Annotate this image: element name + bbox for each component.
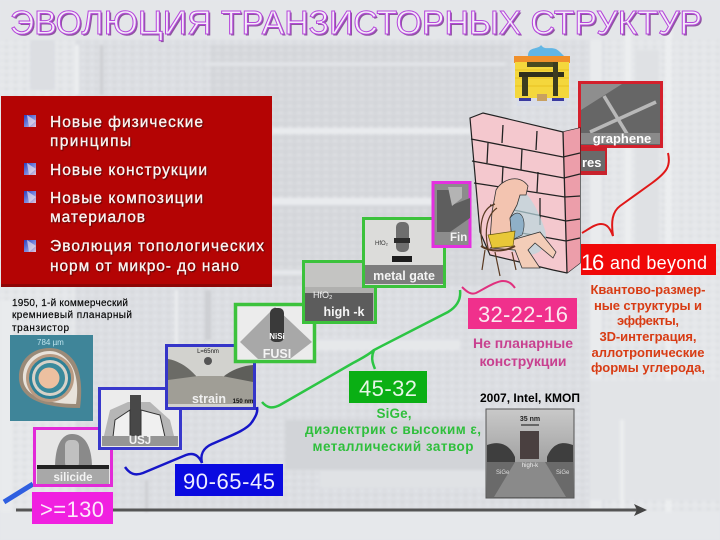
text: quantum structures: [590, 282, 706, 375]
text: non-planar constructions: Не планарные: [473, 335, 573, 351]
image: 2007 Intel transistor: high-k: [522, 463, 539, 469]
timeline arrow: [16, 504, 647, 516]
image: FUSI: FUSI: [263, 347, 291, 361]
label: 16 and beyond: and beyond: [610, 253, 707, 273]
blue brace: [125, 407, 257, 474]
text: non-planar constructions: [473, 335, 573, 369]
image: FinFET: [433, 182, 470, 246]
pink brace: [462, 281, 515, 294]
caption: 1950 transistor: кремниевый планарный: [12, 310, 132, 321]
text: quantum structures: формы углерода,: [591, 360, 705, 375]
image: FUSI: [236, 304, 314, 362]
image: FinFET: Fin: [450, 232, 467, 244]
text: new physical principles: принципы: [50, 133, 131, 150]
image: silicide: silicide: [54, 472, 92, 484]
text: topological norms evolution: Эволюция топологических: [50, 238, 264, 255]
label: >=130: [32, 492, 113, 524]
label: 16 and beyond: 6: [592, 250, 604, 275]
text: new material compositions: [50, 190, 203, 226]
label: 32-22-16: [468, 298, 577, 329]
image: strain: L=65nm: [197, 349, 219, 355]
label: 45-32: [349, 371, 427, 403]
text: quantum structures: аллотропические: [592, 345, 704, 360]
text: quantum structures: ные структуры и: [594, 298, 702, 313]
text: SiGe, high-k, metal gate: SiGe,: [376, 406, 412, 421]
image: planar transistor wafer: 784 µm: [37, 338, 64, 347]
figure: chair: [481, 204, 516, 276]
bullet 3: [24, 191, 36, 203]
image: strain: [166, 346, 254, 408]
image: silicide: [34, 428, 112, 486]
title: ЭВОЛЮЦИЯ ТРАНЗИСТОРНЫХ СТРУКТУР: [12, 6, 704, 42]
blue lead-in stroke: [4, 484, 33, 502]
text: SiGe, high-k, metal gate: [305, 406, 481, 454]
title: ЭВОЛЮЦИЯ ТРАНЗИСТОРНЫХ СТРУКТУР: [10, 4, 702, 41]
text: new physical principles: Новые физические: [50, 114, 203, 131]
label: 90-65-45: 90-65-45: [183, 469, 275, 494]
image: graphene: graphene: [593, 131, 651, 146]
caption: 1950 transistor: 1950, 1-й коммерческий: [12, 298, 128, 309]
image: nanotubes label: [580, 147, 607, 175]
image: high-k: high -k: [324, 305, 365, 319]
figure: cushion: [488, 231, 515, 248]
image: 2007 Intel transistor: SiGe: [556, 470, 570, 476]
label: 16 and beyond: 1: [581, 250, 593, 275]
text: new material compositions: Новые композиции: [50, 190, 203, 207]
image: graphene: [580, 82, 662, 146]
icon: 3D integration chip: [514, 45, 570, 106]
image: USJ: [100, 388, 180, 448]
figure: seated man: [490, 179, 556, 268]
red brace: [582, 153, 669, 236]
bullet 4: [24, 240, 36, 252]
label: >=130: >=130: [40, 497, 104, 522]
caption: 2007 Intel CMOS: 2007, Intel, КМОП: [480, 391, 580, 405]
image: planar transistor wafer: [10, 335, 93, 421]
image: 2007 Intel transistor: [486, 409, 574, 498]
label: 32-22-16: 32-22-16: [478, 302, 568, 327]
label: 45-32: 45-32: [359, 376, 417, 401]
image: metal gate: HfO₂: [375, 241, 389, 247]
text: topological norms evolution: норм от микро- до нано: [50, 258, 239, 275]
image: 2007 Intel transistor: 35 nm: [520, 416, 540, 423]
green brace: [262, 290, 460, 407]
image: 2007 Intel transistor: SiGe: [496, 470, 510, 476]
image: high-k: [304, 262, 376, 322]
bullet 2: [24, 163, 36, 175]
image: strain: strain: [192, 392, 226, 406]
text: quantum structures: 3D-интеграция,: [600, 329, 696, 344]
image: USJ: USJ: [129, 435, 151, 447]
text: topological norms evolution: [50, 238, 264, 275]
panel: principles list: [1, 96, 272, 287]
text: new constructions: Новые конструкции: [50, 162, 207, 179]
caption: 1950 transistor: транзистор: [12, 323, 69, 334]
image: FUSI: NiSi: [269, 332, 285, 341]
image: high-k: HfO₂: [313, 290, 333, 300]
text: quantum structures: эффекты,: [617, 313, 679, 328]
text: non-planar constructions: конструкции: [480, 353, 566, 369]
caption: 1950 transistor: [12, 298, 132, 334]
text: SiGe, high-k, metal gate: металлический затвор: [312, 439, 474, 454]
label: 16 and beyond: [581, 244, 716, 275]
image: strain: 150 nm: [233, 399, 253, 405]
text: new physical principles: [50, 114, 203, 150]
image: metal gate: [364, 218, 444, 286]
text: new material compositions: материалов: [50, 209, 145, 226]
illustration: brick wall with seated figure: [470, 113, 580, 276]
text: SiGe, high-k, metal gate: диэлектрик с высоким ε,: [305, 422, 481, 437]
image: metal gate: metal gate: [373, 269, 435, 283]
bullet 1: [24, 115, 36, 127]
label: 90-65-45: [175, 464, 283, 496]
text: quantum structures: Квантово-размер-: [590, 282, 706, 297]
image: nanotubes label: res: [582, 155, 602, 170]
